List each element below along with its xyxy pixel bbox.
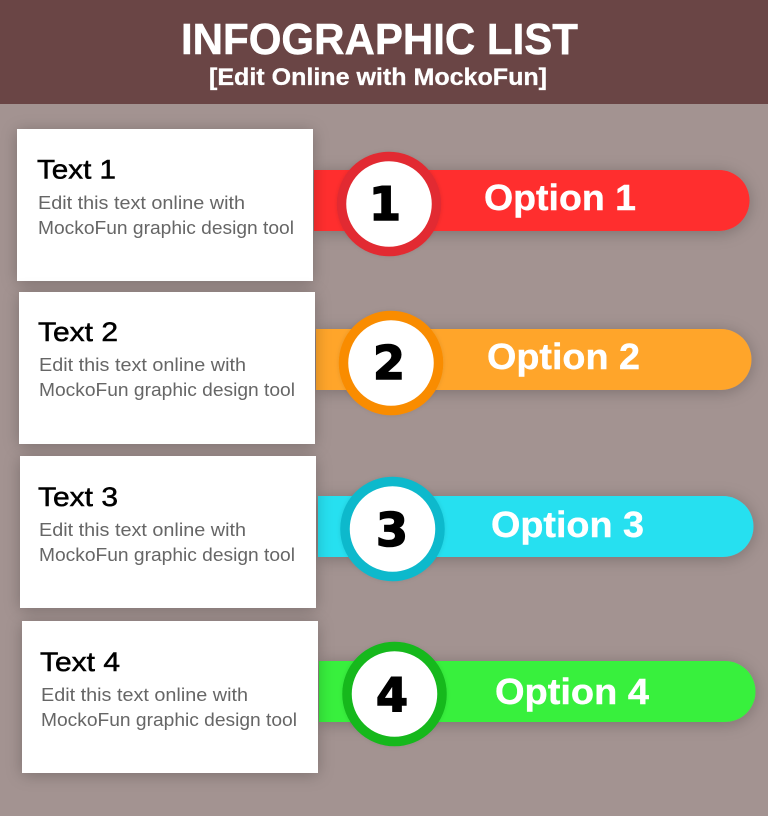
option label 2: Option 2: [487, 336, 640, 377]
card 2 heading: Text 2: [38, 317, 118, 347]
card 2 body text: MockoFun graphic design tool: [39, 379, 295, 400]
card 4 heading: Text 4: [40, 647, 120, 677]
card 3 heading: Text 3: [38, 482, 118, 512]
card 3 body text: Edit this text online with: [39, 519, 246, 540]
title: INFOGRAPHIC LIST: [181, 15, 578, 64]
card 1 body text: MockoFun graphic design tool: [38, 217, 294, 238]
card 1 body text: [38, 192, 294, 238]
card 1 heading: Text 1: [37, 154, 116, 184]
header band: [0, 0, 768, 104]
card 4: [22, 621, 318, 773]
card 3 body text: MockoFun graphic design tool: [39, 544, 295, 565]
card 4 body text: MockoFun graphic design tool: [41, 709, 297, 730]
option label 3: Option 3: [491, 504, 644, 545]
card 2 body text: Edit this text online with: [39, 354, 246, 375]
card 1 body text: Edit this text online with: [38, 192, 245, 213]
number badge 2: [344, 316, 438, 410]
card 3: [20, 456, 316, 608]
card 4 body text: [41, 684, 297, 730]
numeral 4: 4: [376, 668, 408, 722]
option label 4: Option 4: [495, 671, 649, 712]
number badge 4: [347, 646, 442, 742]
numeral 3: 3: [376, 503, 408, 557]
card 2 body text: [39, 354, 295, 400]
option bar 4: [319, 661, 755, 722]
option bar 1: [314, 170, 749, 231]
numeral 1: 1: [369, 177, 401, 231]
card 4 body text: Edit this text online with: [41, 684, 248, 705]
subtitle: [Edit Online with MockoFun]: [209, 64, 547, 91]
number badge 3: [345, 482, 440, 576]
number badge 1: [342, 156, 436, 252]
option bar 2: [316, 329, 752, 390]
option label 1: Option 1: [484, 177, 636, 218]
option bar 3: [318, 496, 753, 557]
card 2: [19, 292, 315, 444]
card 3 body text: [39, 519, 295, 565]
card 1: [17, 129, 313, 281]
numeral 2: 2: [373, 336, 405, 390]
